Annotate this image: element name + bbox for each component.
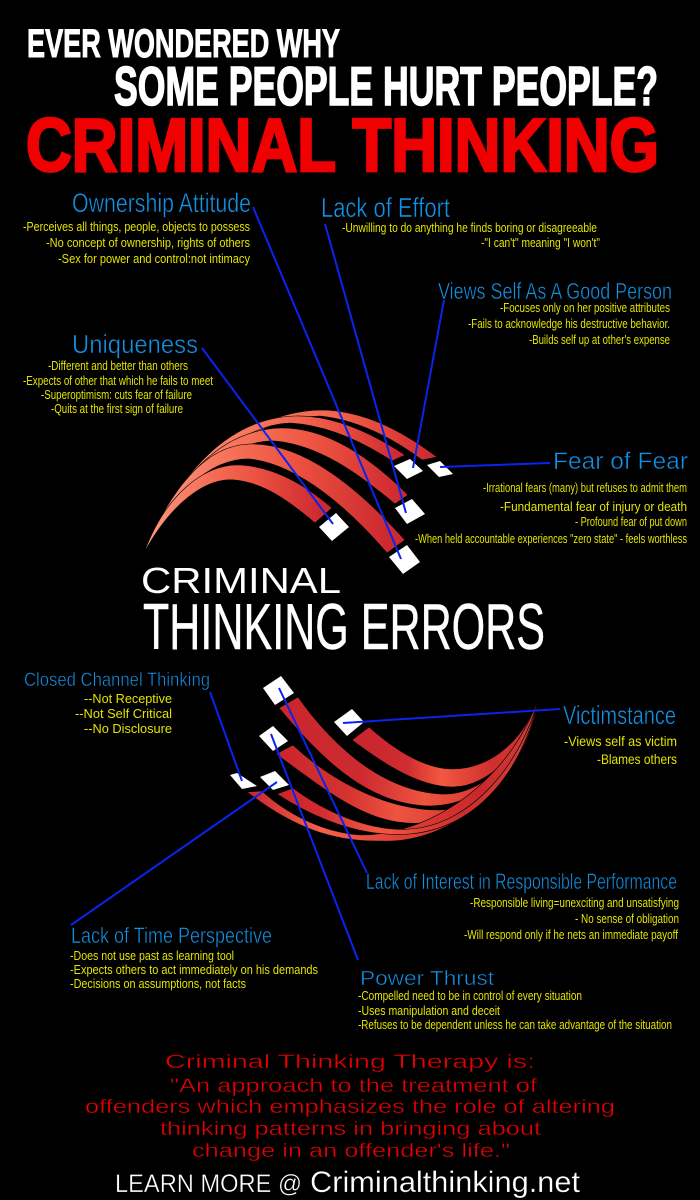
panel: power thrust: -Uses manipulation and deceit — [358, 1003, 500, 1018]
panel: uniqueness: -Different and better than others — [48, 358, 188, 373]
call to action — [115, 1166, 581, 1199]
panel: lack of effort: -"I can't" meaning "I won't" — [481, 235, 600, 250]
panel: ownership attitude: -Perceives all things, people, objects to possess — [23, 219, 250, 234]
panel: fear of fear — [415, 448, 688, 546]
panel: lack of time perspective — [70, 923, 318, 991]
panel: uniqueness — [23, 329, 213, 416]
panel: power thrust — [358, 968, 672, 1032]
panel: lack of time perspective: -Does not use past as learning tool — [70, 948, 234, 963]
diagram: lower red arc — [230, 676, 539, 841]
therapy definition: offenders which emphasizes the role of altering — [85, 1096, 615, 1118]
panel: lack of time perspective: -Decisions on assumptions, not facts — [70, 976, 246, 991]
heading: Closed Channel Thinking — [24, 670, 210, 691]
therapy definition: Criminal Thinking Therapy is: — [165, 1051, 535, 1073]
title — [26, 22, 659, 187]
call to action: Criminalthinking.net — [310, 1166, 581, 1199]
title line 1: EVER WONDERED WHY — [27, 22, 340, 66]
therapy definition: thinking patterns in bringing about — [160, 1118, 542, 1140]
heading: Uniqueness — [72, 329, 198, 359]
panel: power thrust: -Compelled need to be in control of every situation — [358, 988, 582, 1003]
panel: ownership attitude: -No concept of ownership, rights of others — [46, 235, 250, 250]
panel: victimstance: -Blames others — [597, 751, 677, 767]
panel: closed channel thinking — [24, 670, 210, 736]
panel: victimstance: -Views self as victim — [564, 733, 677, 749]
panel: uniqueness: -Expects of other that which he fails to meet — [23, 373, 213, 388]
panel: closed channel thinking: --Not Self Critical — [75, 706, 172, 721]
panel: lack of time perspective: -Expects others to act immediately on his demands — [70, 962, 318, 977]
heading: Power Thrust — [360, 968, 494, 990]
panel: lack of interest in responsible performance — [366, 869, 679, 942]
panel: victimstance — [563, 700, 677, 767]
panel: ownership attitude — [23, 188, 251, 266]
panel: uniqueness: -Superoptimism: cuts fear of failure — [41, 387, 192, 402]
therapy definition: change in an offender's life." — [192, 1140, 510, 1162]
connector lines: upper — [202, 207, 550, 559]
central heading: CRIMINAL — [141, 560, 341, 601]
heading: Fear of Fear — [553, 448, 688, 475]
therapy definition: "An approach to the treatment of — [170, 1075, 538, 1097]
heading: Ownership Attitude — [72, 188, 251, 218]
heading: Lack of Time Perspective — [71, 923, 272, 948]
panel: lack of effort — [321, 192, 600, 250]
panel: uniqueness: -Quits at the first sign of failure — [51, 401, 183, 416]
central heading — [141, 560, 545, 663]
panel: closed channel thinking: --No Disclosure — [84, 721, 172, 736]
therapy definition — [85, 1051, 615, 1162]
panel: ownership attitude: -Sex for power and control:not intimacy — [58, 251, 250, 266]
connector lines: lower — [71, 688, 560, 960]
diagram: upper red arc — [144, 410, 453, 574]
heading: Lack of Effort — [321, 192, 450, 223]
panel: closed channel thinking: --Not Receptive — [84, 691, 172, 706]
call to action: LEARN MORE @ — [115, 1170, 302, 1198]
panel: views self as a good person — [438, 278, 672, 347]
panel: lack of effort: -Unwilling to do anything he finds boring or disagreeable — [342, 220, 597, 235]
